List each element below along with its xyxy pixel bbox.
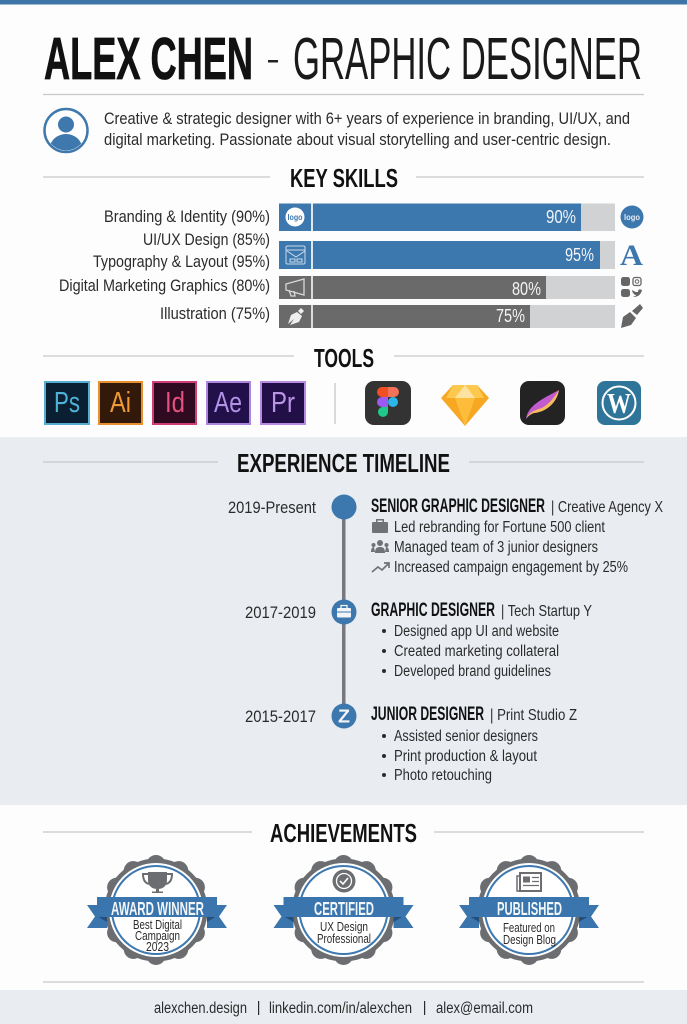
badge: published: PUBLISHED	[497, 899, 562, 919]
timeline entry: 2017-2019: Developed brand guidelines	[394, 663, 551, 680]
bar: illustration 75%	[279, 305, 615, 328]
icon: premiere	[261, 382, 305, 424]
skill labels	[59, 208, 270, 323]
icon: trophy	[143, 872, 172, 893]
timeline axis	[342, 507, 346, 716]
bar: digital marketing 80%: 80%	[512, 279, 541, 299]
bar: branding 90%	[279, 204, 615, 231]
icon: pen nib	[621, 304, 643, 328]
badge: award winner: AWARD WINNER	[111, 899, 204, 919]
timeline entry: 2015-2017: JUNIOR DESIGNER	[371, 704, 484, 725]
icon: briefcase	[372, 519, 388, 533]
timeline entry: 2017-2019: Created marketing collateral	[394, 643, 559, 660]
icon: wordpress	[597, 381, 641, 425]
badge: published	[459, 855, 599, 965]
icon: avatar	[44, 109, 88, 162]
timeline entry: 2015-2017	[245, 704, 577, 784]
bar: typography 95%: 95%	[565, 245, 594, 265]
timeline entry: 2015-2017: Assisted senior designers	[394, 728, 538, 745]
profile summary	[43, 108, 630, 154]
icon: check seal	[332, 870, 356, 892]
badge: award winner: 2023	[146, 940, 169, 954]
icon: logo seal	[620, 206, 644, 228]
icon: premiere: Pr	[271, 387, 295, 419]
skill labels: UI/UX Design (85%)	[143, 231, 270, 249]
timeline entry: 2019-present: 2019-Present	[228, 499, 316, 517]
icon: after effects: Ae	[214, 387, 242, 419]
panel: experience timeline	[0, 437, 687, 805]
timeline entry: 2015-2017: | Print Studio Z	[490, 707, 577, 724]
footer: alex@email.com	[436, 1000, 533, 1017]
timeline entry: 2017-2019: Designed app UI and website	[394, 623, 559, 640]
skill labels: Digital Marketing Graphics (80%)	[59, 277, 270, 295]
timeline entry: 2019-present: Increased campaign engagement by 25%	[394, 559, 628, 576]
heading: experience timeline: EXPERIENCE TIMELINE	[237, 448, 450, 478]
icon: social media	[621, 277, 642, 297]
icon: sketch	[441, 385, 489, 426]
bar: digital marketing 80%	[279, 276, 615, 299]
badge: award winner: Best Digital	[133, 918, 182, 932]
summary text: digital marketing. Passionate about visual storytelling and user-centric design.	[104, 131, 611, 149]
bar: branding 90%: 90%	[546, 207, 576, 227]
skill labels: Typography & Layout (95%)	[93, 253, 270, 271]
footer: linkedin.com/in/alexchen	[269, 1000, 412, 1017]
timeline entry: 2017-2019: | Tech Startup Y	[501, 603, 592, 620]
badge: award winner	[87, 855, 227, 965]
badge: certified: UX Design	[320, 920, 368, 934]
icon: procreate	[520, 381, 565, 425]
badge: published: Design Blog	[503, 933, 556, 947]
title	[44, 26, 642, 92]
timeline entry: 2015-2017: 2015-2017	[245, 708, 316, 726]
skill bars	[279, 204, 615, 328]
skill labels: Illustration (75%)	[160, 305, 270, 323]
icon: photoshop: Ps	[54, 387, 80, 419]
footer	[0, 990, 687, 1024]
timeline entry: 2019-present: SENIOR GRAPHIC DESIGNER	[371, 496, 545, 517]
timeline entry: 2015-2017: Z	[338, 706, 350, 726]
timeline entry: 2017-2019: 2017-2019	[245, 604, 316, 622]
skill labels: Branding & Identity (90%)	[104, 208, 270, 226]
summary text	[104, 110, 630, 149]
icon: logo seal: logo	[624, 213, 640, 222]
icon: indesign	[153, 382, 196, 424]
icon: figma	[365, 381, 411, 425]
summary text: Creative & strategic designer with 6+ years of experience in branding, UI/UX, and	[104, 110, 630, 128]
icon: illustrator	[99, 382, 142, 424]
tools row	[45, 381, 641, 426]
top accent bar	[0, 0, 687, 4]
timeline entry: 2019-present: Led rebranding for Fortune 500 client	[394, 519, 606, 536]
timeline entry: 2015-2017: Print production & layout	[394, 748, 538, 765]
icon: wordpress: W	[607, 389, 631, 420]
heading: achievements: ACHIEVEMENTS	[270, 818, 417, 848]
footer: alexchen.design	[154, 1000, 247, 1017]
heading: key skills: KEY SKILLS	[290, 163, 398, 193]
icon: newspaper	[517, 873, 541, 891]
icon: team	[371, 540, 389, 553]
badge: certified: CERTIFIED	[314, 899, 374, 919]
bar: branding 90%: logo	[288, 213, 303, 222]
timeline entry: 2015-2017: Photo retouching	[394, 767, 492, 784]
heading: tools: TOOLS	[314, 343, 374, 373]
icon: photoshop	[45, 382, 89, 424]
badge: certified	[274, 855, 414, 965]
timeline entry: 2019-present: Managed team of 3 junior designers	[394, 539, 598, 556]
bar: typography 95%	[279, 241, 615, 269]
icon: trend arrow	[372, 563, 389, 572]
badge: published: Featured on	[503, 921, 555, 935]
timeline entry: 2019-present	[228, 494, 663, 576]
bar: illustration 75%: 75%	[496, 306, 525, 326]
badge: certified: Professional	[317, 932, 371, 946]
icon: illustrator: Ai	[110, 387, 131, 419]
icon: indesign: Id	[165, 387, 185, 419]
icon: after effects	[207, 382, 250, 424]
badge: award winner: Campaign	[135, 929, 180, 943]
icon: letter A: A	[620, 239, 643, 272]
title: ALEX CHEN	[44, 26, 253, 92]
timeline entry: 2017-2019: GRAPHIC DESIGNER	[371, 600, 495, 621]
timeline entry: 2017-2019	[245, 600, 592, 680]
